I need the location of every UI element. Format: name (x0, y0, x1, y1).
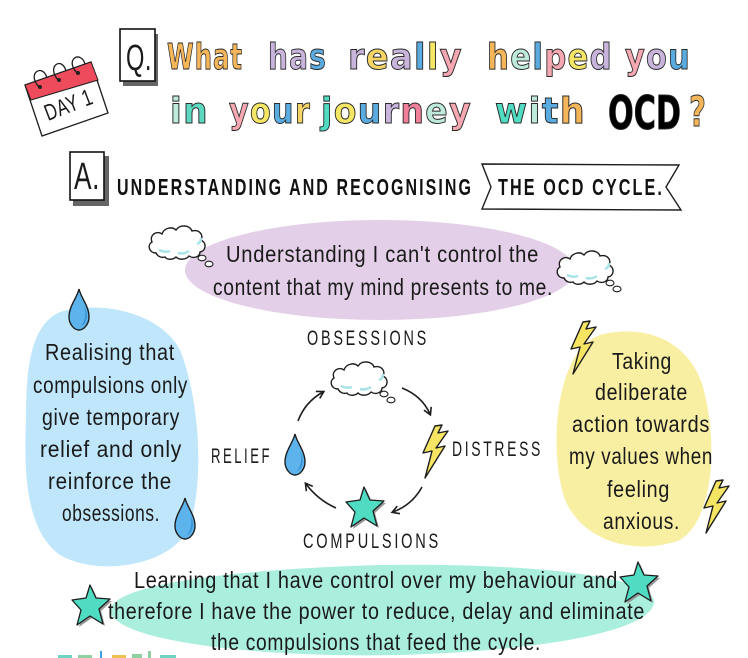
panel: blue relief statement: Realising that (45, 339, 175, 365)
answer heading: UNDERSTANDING AND RECOGNISING (117, 174, 473, 200)
title line 2: journey (319, 91, 472, 132)
panel: teal behaviour statement (108, 565, 654, 655)
icon: star left (72, 585, 112, 627)
icon: cycle star (346, 487, 386, 529)
panel: blue relief statement: obsessions. (62, 500, 160, 526)
panel: yellow values statement: my values when (569, 443, 713, 469)
panel: yellow values statement: Taking (612, 348, 672, 374)
cropped logo text (58, 651, 176, 658)
icon: calendar day 1 (25, 57, 108, 136)
panel: blue relief statement: give temporary (42, 404, 180, 430)
icon: cloud left (149, 226, 213, 267)
icon: cloud right (557, 251, 621, 292)
panel: teal behaviour statement: therefore I have the power to reduce, delay and eliminate (108, 598, 645, 624)
diagram: OCD cycle (211, 327, 543, 553)
panel: blue relief statement: compulsions only (33, 372, 188, 398)
icon: cycle drop (285, 434, 305, 475)
icon: star right (620, 562, 660, 604)
panel: blue relief statement: relief and only (40, 436, 182, 462)
panel: yellow values statement: feeling (607, 476, 670, 502)
title line 1 (167, 37, 691, 78)
arrow: relief to obsessions (298, 392, 323, 421)
icon: bolt top (571, 321, 596, 374)
icon: drop top (69, 289, 89, 330)
title line 1: really (348, 37, 463, 78)
panel: teal behaviour statement: Learning that I have control over my behaviour and (134, 567, 618, 593)
icon: drop bottom (175, 498, 195, 539)
panel: yellow values statement: action towards (572, 411, 710, 437)
icon: cycle cloud (331, 362, 395, 403)
arrow: distress to compulsions (393, 487, 422, 512)
answer box (70, 152, 109, 206)
title line 2: OCD (608, 86, 681, 140)
title line 1: helped (487, 37, 613, 78)
panel: blue relief statement (25, 308, 198, 566)
banner: the OCD cycle (482, 164, 681, 210)
panel: purple control statement: Understanding I can't control the (226, 241, 539, 267)
answer box: A. (74, 156, 100, 198)
icon: cycle bolt (423, 425, 448, 478)
panel: purple control statement: content that my mind presents to me. (213, 274, 553, 300)
label: obsessions: OBSESSIONS (307, 327, 429, 350)
panel: yellow values statement: anxious. (603, 508, 680, 534)
label: relief: RELIEF (211, 445, 272, 468)
title line 2: your (229, 91, 311, 132)
label: compulsions: COMPULSIONS (303, 530, 441, 553)
title line 1: you (625, 37, 691, 78)
arrow: obsessions to distress (402, 388, 430, 414)
title line 2: ? (689, 87, 706, 136)
title line 2: with (495, 91, 586, 132)
banner: the OCD cycle: THE OCD CYCLE. (498, 174, 664, 200)
panel: yellow values statement (557, 331, 713, 547)
panel: blue relief statement: reinforce the (48, 468, 172, 494)
panel: purple control statement (185, 220, 575, 320)
question box: Q. (126, 37, 152, 78)
title line 2 (170, 86, 706, 140)
label: distress: DISTRESS (452, 438, 543, 461)
panel: teal behaviour statement: the compulsions that feed the cycle. (211, 629, 541, 655)
icon: calendar day 1: DAY 1 (40, 83, 96, 126)
title line 1: What (167, 37, 243, 78)
panel: yellow values statement: deliberate (595, 379, 688, 405)
question box (120, 29, 158, 86)
arrow: compulsions to relief (306, 484, 336, 508)
title line 2: in (170, 91, 209, 132)
title line 1: has (268, 37, 327, 78)
icon: bolt bottom (704, 480, 729, 533)
